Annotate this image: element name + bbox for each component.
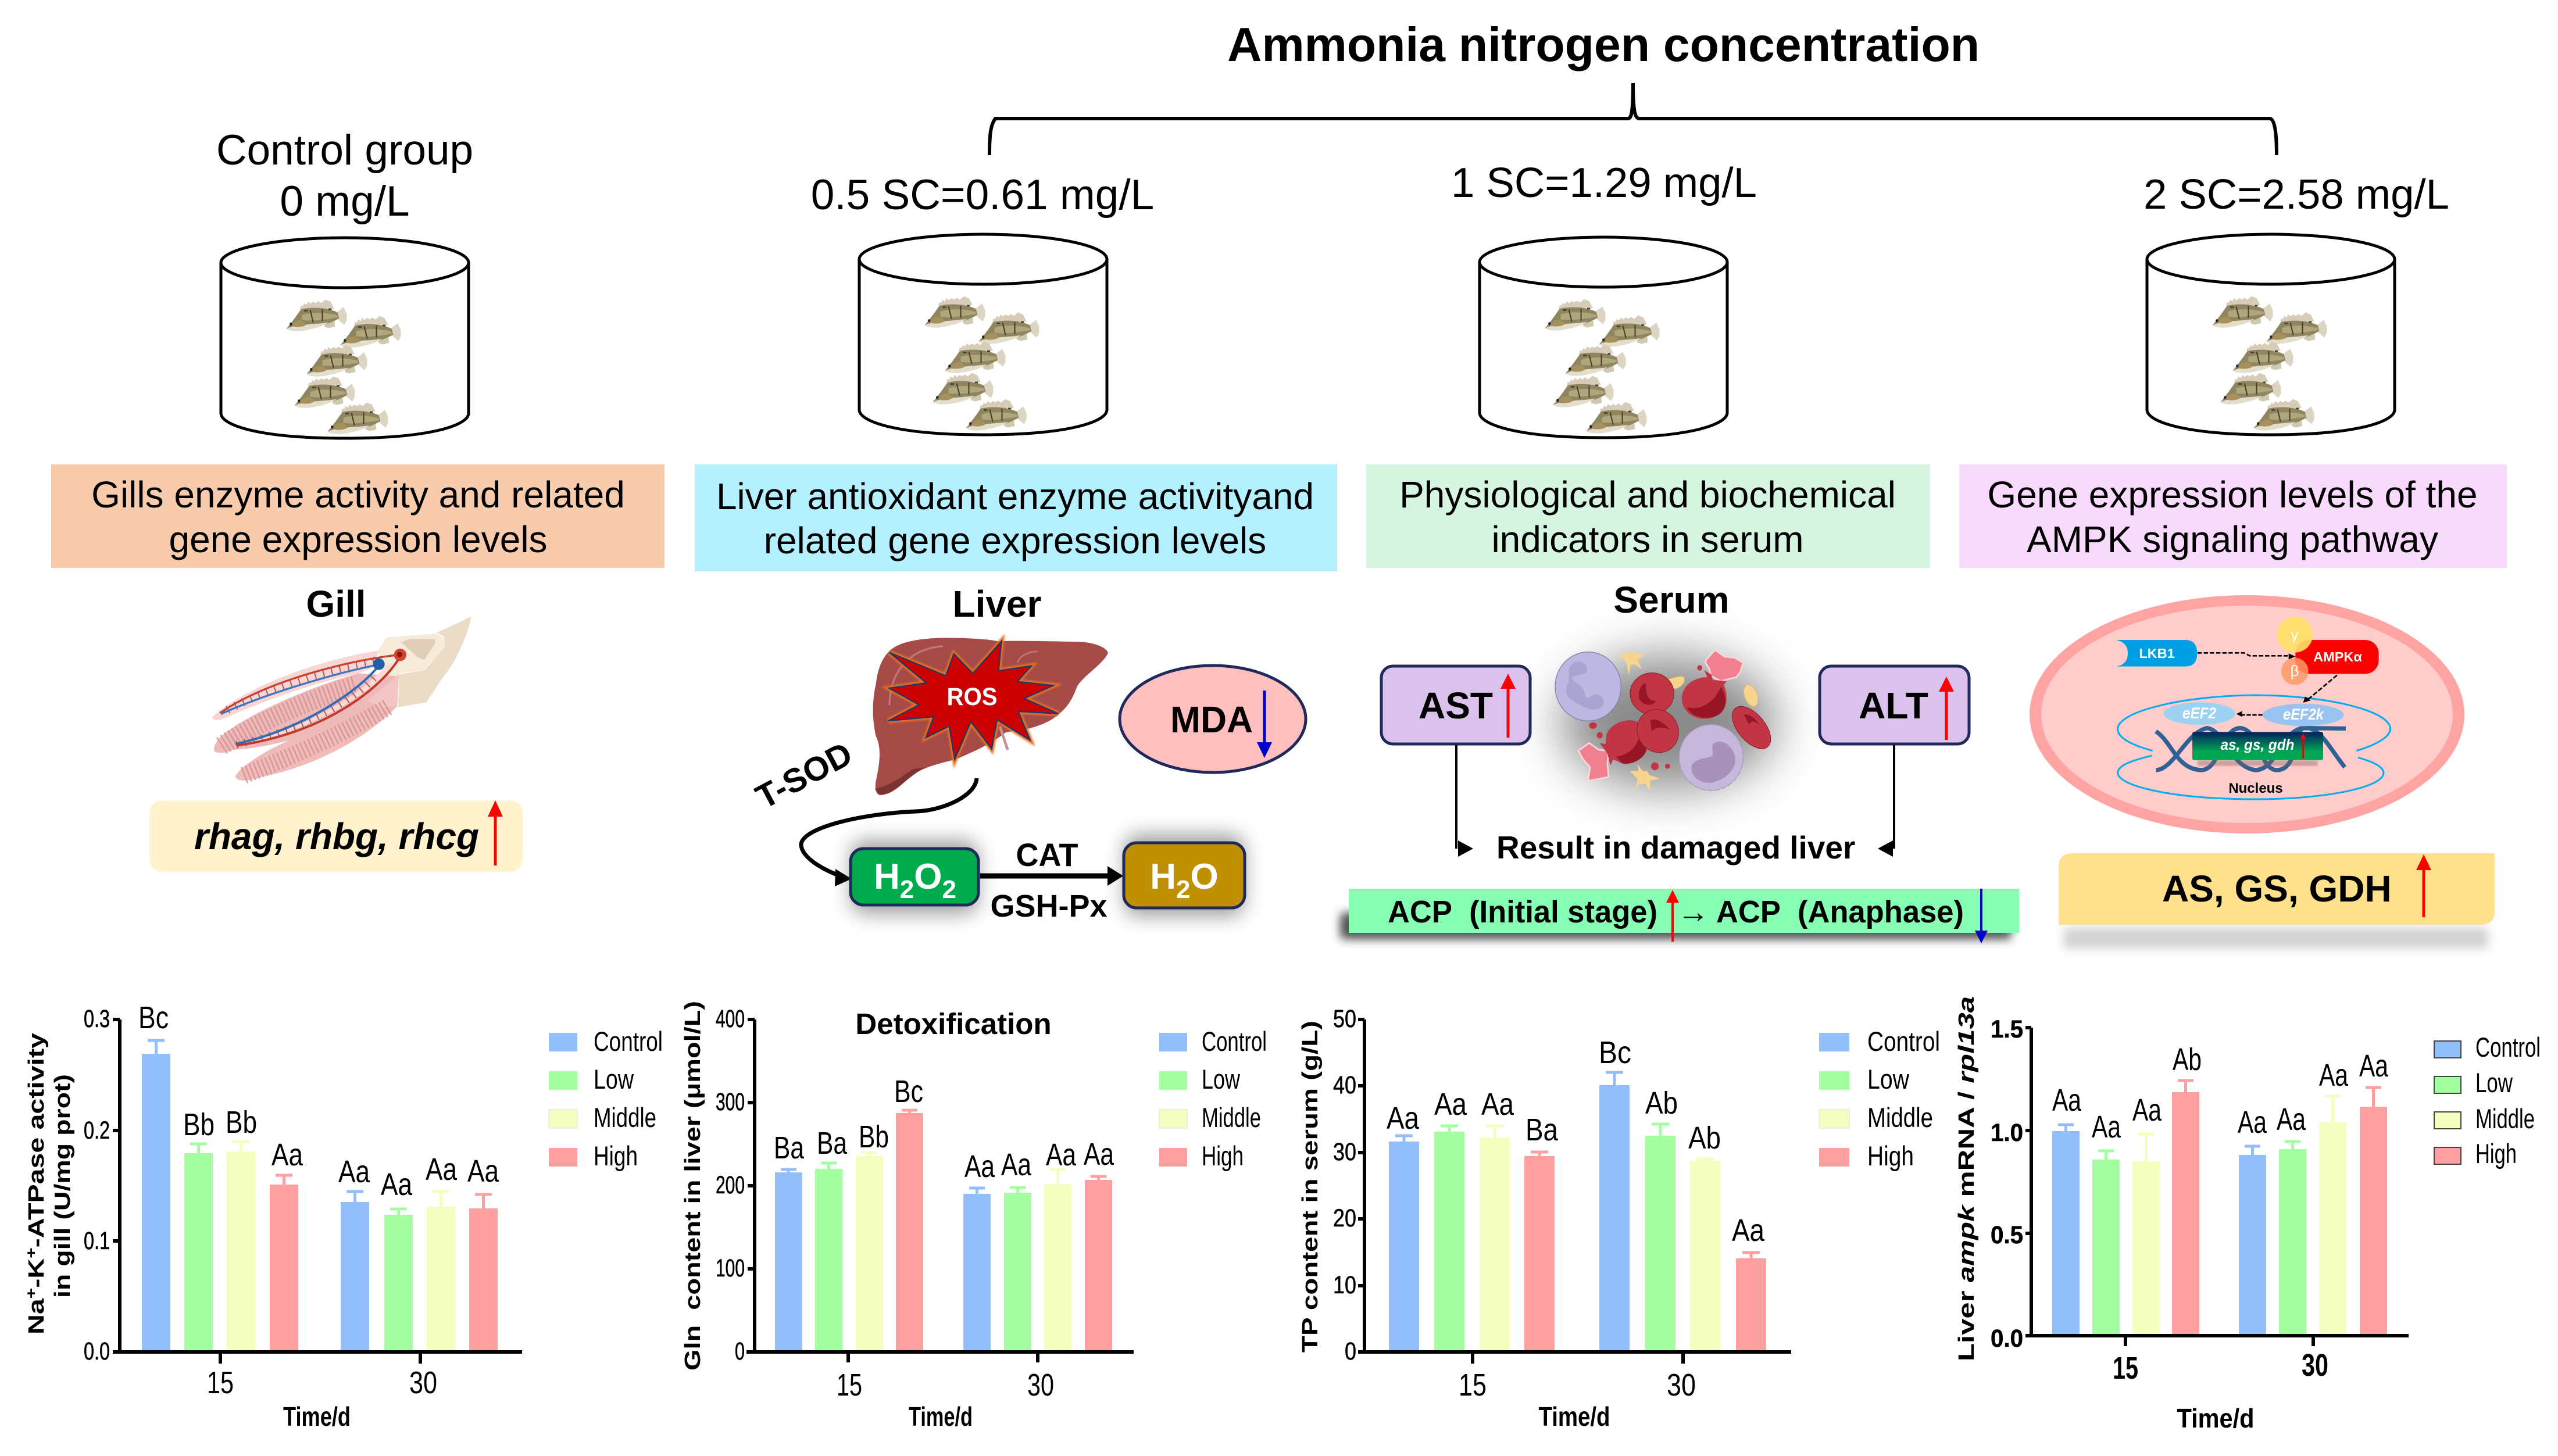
legend: Middle <box>594 1102 656 1133</box>
significance letters: Aa <box>1481 1087 1514 1122</box>
bracket: ammonia concentration groups <box>989 83 2277 155</box>
significance letters: Aa <box>2052 1083 2082 1118</box>
box: H2O: H <box>1150 857 1176 897</box>
x labels: Time/d <box>1538 1401 1610 1432</box>
significance letters: Aa <box>2359 1049 2389 1083</box>
significance letters: Ab <box>1645 1086 1678 1121</box>
illustration: AMPK signalling cell: Nucleus <box>2228 781 2283 796</box>
y tick labels: 40 <box>1333 1071 1356 1099</box>
axes <box>2025 1028 2409 1346</box>
significance letters <box>138 1000 499 1202</box>
y tick labels: 0.0 <box>1991 1325 2023 1353</box>
significance letters: Ba <box>774 1131 805 1165</box>
x labels: Time/d <box>909 1401 973 1432</box>
axes <box>746 1019 1134 1362</box>
y tick labels: 0.1 <box>84 1227 110 1255</box>
y tick labels <box>1333 1005 1356 1365</box>
legend: High <box>1202 1140 1244 1171</box>
y tick labels <box>716 1005 745 1365</box>
illustration: AMPK signalling cell <box>2030 595 2464 833</box>
x labels: 30 <box>1667 1368 1696 1403</box>
significance letters: Aa <box>2238 1105 2267 1140</box>
box: H2O: 2 <box>1176 875 1191 904</box>
text: result in damaged liver: Result in damaged liver <box>1496 829 1855 865</box>
chart: Gln content in liver <box>681 1001 1267 1432</box>
significance letters: Aa <box>426 1152 458 1187</box>
legend: High <box>594 1140 638 1171</box>
significance letters: Aa <box>2319 1058 2349 1093</box>
y tick labels: 50 <box>1333 1005 1356 1033</box>
significance letters: Ba <box>817 1126 848 1161</box>
tank: control group with fish <box>221 238 469 438</box>
legend: High <box>2475 1138 2517 1169</box>
y tick labels: 0 <box>1345 1337 1356 1365</box>
box: H2O2: H <box>874 857 900 897</box>
callout: rhag, rhbg, rhcg: rhag, rhbg, rhcg <box>194 815 479 857</box>
illustration: blood cells <box>1555 650 1778 792</box>
y tick labels: 0.3 <box>84 1005 110 1033</box>
y-axis label: Gln content: Gln content in liver (μmol/L) <box>681 1001 705 1371</box>
panel header: liver: related gene expression levels <box>764 520 1266 561</box>
significance letters <box>2052 1042 2389 1144</box>
y tick labels: 300 <box>716 1088 745 1116</box>
y-axis label: Na+-K+-ATPase: -ATPase activity <box>24 1033 49 1247</box>
y-axis label: Na+-K+-ATPase: Na <box>24 1298 49 1335</box>
chart: TP content in serum <box>1298 1005 1940 1432</box>
significance letters: Aa <box>1387 1101 1420 1136</box>
y tick labels <box>84 1005 110 1365</box>
y tick labels <box>1991 1015 2023 1353</box>
panel header: serum: Physiological and biochemical <box>1399 474 1896 516</box>
label: control group: 0 mg/L <box>280 178 410 225</box>
legend: Low <box>594 1064 634 1094</box>
x labels: 30 <box>1027 1368 1054 1403</box>
label: CAT: CAT <box>1016 836 1078 873</box>
box: H2O2: O <box>914 857 942 897</box>
callout: ACP bar: ACP (Anaphase) <box>1716 895 1964 929</box>
box: H2O2 <box>851 840 978 914</box>
callout: MDA down: MDA <box>1170 699 1253 740</box>
y tick labels: 0.2 <box>84 1117 110 1144</box>
x labels <box>837 1368 1054 1432</box>
legend: Control <box>1867 1026 1940 1057</box>
significance letters: Bb <box>859 1119 889 1154</box>
legend <box>1819 1026 1940 1171</box>
box: AST up: AST <box>1419 685 1493 727</box>
y tick labels: 0.5 <box>1991 1221 2023 1249</box>
illustration: AMPK signalling cell: eEF2 <box>2182 704 2216 722</box>
legend: Middle <box>1867 1102 1933 1133</box>
legend <box>1159 1026 1267 1171</box>
legend <box>549 1026 663 1171</box>
chart: Na+-K+-ATPase in gill <box>23 1000 663 1432</box>
y tick labels: 30 <box>1333 1138 1356 1166</box>
box: ALT up: ALT <box>1859 685 1928 727</box>
y-axis label: Na+-K+-ATPase: -K <box>24 1258 49 1288</box>
x labels: Time/d <box>283 1401 351 1432</box>
significance letters: Bc <box>894 1074 923 1109</box>
bars <box>775 1110 1112 1350</box>
arrow: AST to damaged liver <box>1456 745 1473 857</box>
significance letters: Aa <box>381 1167 413 1202</box>
arrow: ALT to damaged liver <box>1878 745 1894 857</box>
y tick labels: 0 <box>735 1337 745 1365</box>
y tick labels: 20 <box>1333 1204 1356 1232</box>
y tick labels: 1.5 <box>1991 1015 2023 1043</box>
significance letters: Aa <box>964 1149 995 1184</box>
significance letters: Ba <box>1525 1112 1559 1147</box>
box: H2O2: 2 <box>942 875 956 904</box>
significance letters: Bb <box>226 1105 257 1140</box>
tank: 2 SC with fish <box>2147 234 2395 435</box>
illustration: gill <box>212 617 471 781</box>
y-axis label: TP content: TP content in serum (g/L) <box>1298 1021 1323 1353</box>
significance letters: Bc <box>138 1000 169 1035</box>
legend: Middle <box>2475 1103 2535 1134</box>
x labels: 15 <box>2113 1351 2138 1386</box>
y-axis label: Na+-K+-ATPase: in gill (U/mg prot) <box>51 1074 75 1298</box>
legend: Middle <box>1202 1102 1261 1133</box>
bars <box>2052 1081 2387 1334</box>
legend: Control <box>1202 1026 1267 1057</box>
illustration: AMPK signalling cell: eEF2k <box>2283 706 2325 723</box>
illustration: AMPK signalling cell: AMPKα <box>2313 649 2362 664</box>
x labels: 15 <box>207 1365 234 1400</box>
label: T-SOD: T-SOD <box>750 735 859 816</box>
legend: Low <box>2475 1067 2513 1098</box>
label: GSH-Px: GSH-Px <box>990 889 1107 924</box>
illustration: AMPK signalling cell: β <box>2291 662 2299 679</box>
label: 0.5 SC: 0.5 SC=0.61 mg/L <box>811 171 1154 219</box>
significance letters: Aa <box>467 1154 499 1189</box>
panel header: serum <box>1366 464 1930 568</box>
legend: Control <box>594 1026 663 1057</box>
panel header: AMPK <box>1959 464 2507 568</box>
axes <box>1358 1019 1791 1364</box>
significance letters: Aa <box>2277 1102 2306 1137</box>
callout: AS, GS, GDH <box>2059 853 2495 949</box>
tank: 1 SC with fish <box>1480 237 1727 438</box>
y tick labels: 10 <box>1333 1271 1356 1299</box>
significance letters <box>1387 1035 1765 1248</box>
heading: Liver: Liver <box>953 583 1041 625</box>
significance letters: Aa <box>1084 1137 1114 1172</box>
panel header: serum: indicators in serum <box>1491 518 1804 560</box>
arrow: H2O2 to H2O <box>980 866 1123 886</box>
significance letters: Aa <box>271 1137 303 1172</box>
legend: Low <box>1202 1064 1241 1094</box>
y-axis label: Na+-K+-ATPase: + <box>23 1288 40 1298</box>
x labels <box>2113 1348 2328 1433</box>
legend <box>2434 1032 2541 1169</box>
significance letters: Aa <box>2132 1093 2162 1128</box>
bars <box>142 1040 498 1350</box>
y tick labels: 400 <box>716 1005 745 1033</box>
title: Ammonia nitrogen concentration <box>1227 18 1980 71</box>
illustration: AMPK signalling cell: γ <box>2291 626 2299 643</box>
box: ALT up <box>1820 666 1969 744</box>
x labels: 30 <box>2302 1348 2328 1383</box>
y-axis label: ampk mRNA: Liver ampk mRNA / rpl13a <box>1955 996 1979 1361</box>
significance letters: Aa <box>1434 1087 1467 1122</box>
box: H2O <box>1124 834 1245 917</box>
panel header: gills: gene expression levels <box>169 518 548 560</box>
axes <box>113 1019 522 1364</box>
y-axis label: Na+-K+-ATPase <box>23 1033 75 1335</box>
heading: Serum: Serum <box>1613 579 1730 621</box>
panel header: gills: Gills enzyme activity and related <box>91 474 625 516</box>
significance letters: Aa <box>338 1154 370 1189</box>
callout: AS, GS, GDH: AS, GS, GDH <box>2162 868 2392 910</box>
x labels: 15 <box>837 1368 862 1403</box>
significance letters: Aa <box>1046 1137 1077 1172</box>
arrow: T-SOD curve to H2O2 <box>801 778 977 886</box>
callout: rhag, rhbg, rhcg <box>149 800 523 872</box>
x labels <box>207 1365 437 1432</box>
y tick labels: 200 <box>716 1171 745 1199</box>
significance letters: Bb <box>183 1107 215 1142</box>
tank: 0.5 SC with fish <box>859 234 1107 435</box>
x labels: 15 <box>1459 1368 1487 1403</box>
x labels <box>1459 1368 1696 1432</box>
chart: liver ampk mRNA <box>1955 996 2541 1433</box>
callout: MDA down <box>1120 666 1306 772</box>
box: AST up <box>1381 666 1530 744</box>
label: control group: Control group <box>216 127 473 174</box>
panel header: gills <box>51 464 664 568</box>
label: 1 SC: 1 SC=1.29 mg/L <box>1451 159 1757 206</box>
significance letters: Aa <box>1001 1147 1032 1182</box>
y tick labels: 1.0 <box>1991 1119 2023 1147</box>
illustration: AMPK signalling cell: LKB1 <box>2139 646 2175 661</box>
heading: Gill: Gill <box>306 583 366 625</box>
panel header: AMPK: Gene expression levels of the <box>1987 474 2478 516</box>
y tick labels: 0.0 <box>84 1337 110 1365</box>
box: H2O: O <box>1191 857 1219 897</box>
panel header: liver: Liver antioxidant enzyme activityand <box>716 475 1314 517</box>
illustration: liver with ROS burst <box>873 638 1108 795</box>
chart title: Detoxification: Detoxification <box>855 1007 1052 1040</box>
box: H2O2: 2 <box>900 875 914 904</box>
callout: ACP bar: → <box>1677 895 1709 929</box>
y-axis label: Na+-K+-ATPase: + <box>23 1247 40 1258</box>
legend: High <box>1867 1140 1914 1171</box>
significance letters: Aa <box>1732 1213 1765 1248</box>
significance letters: Ab <box>1688 1121 1721 1156</box>
bars <box>1389 1072 1766 1350</box>
callout: ACP bar: ACP (Initial stage) <box>1388 895 1657 929</box>
significance letters <box>774 1074 1114 1184</box>
y tick labels: 100 <box>716 1254 745 1282</box>
x labels: 30 <box>409 1365 437 1400</box>
callout: ACP bar <box>1340 889 2019 943</box>
panel header: AMPK: AMPK signaling pathway <box>2027 518 2438 560</box>
significance letters: Bc <box>1599 1035 1631 1070</box>
significance letters: Aa <box>2092 1110 2121 1144</box>
label: 2 SC: 2 SC=2.58 mg/L <box>2143 171 2449 218</box>
illustration: liver with ROS burst: ROS <box>946 683 998 711</box>
legend: Low <box>1867 1064 1910 1094</box>
x labels: Time/d <box>2177 1403 2255 1433</box>
illustration: AMPK signalling cell: as, gs, gdh <box>2221 736 2294 753</box>
panel header: liver <box>695 464 1337 571</box>
significance letters: Ab <box>2173 1042 2202 1077</box>
